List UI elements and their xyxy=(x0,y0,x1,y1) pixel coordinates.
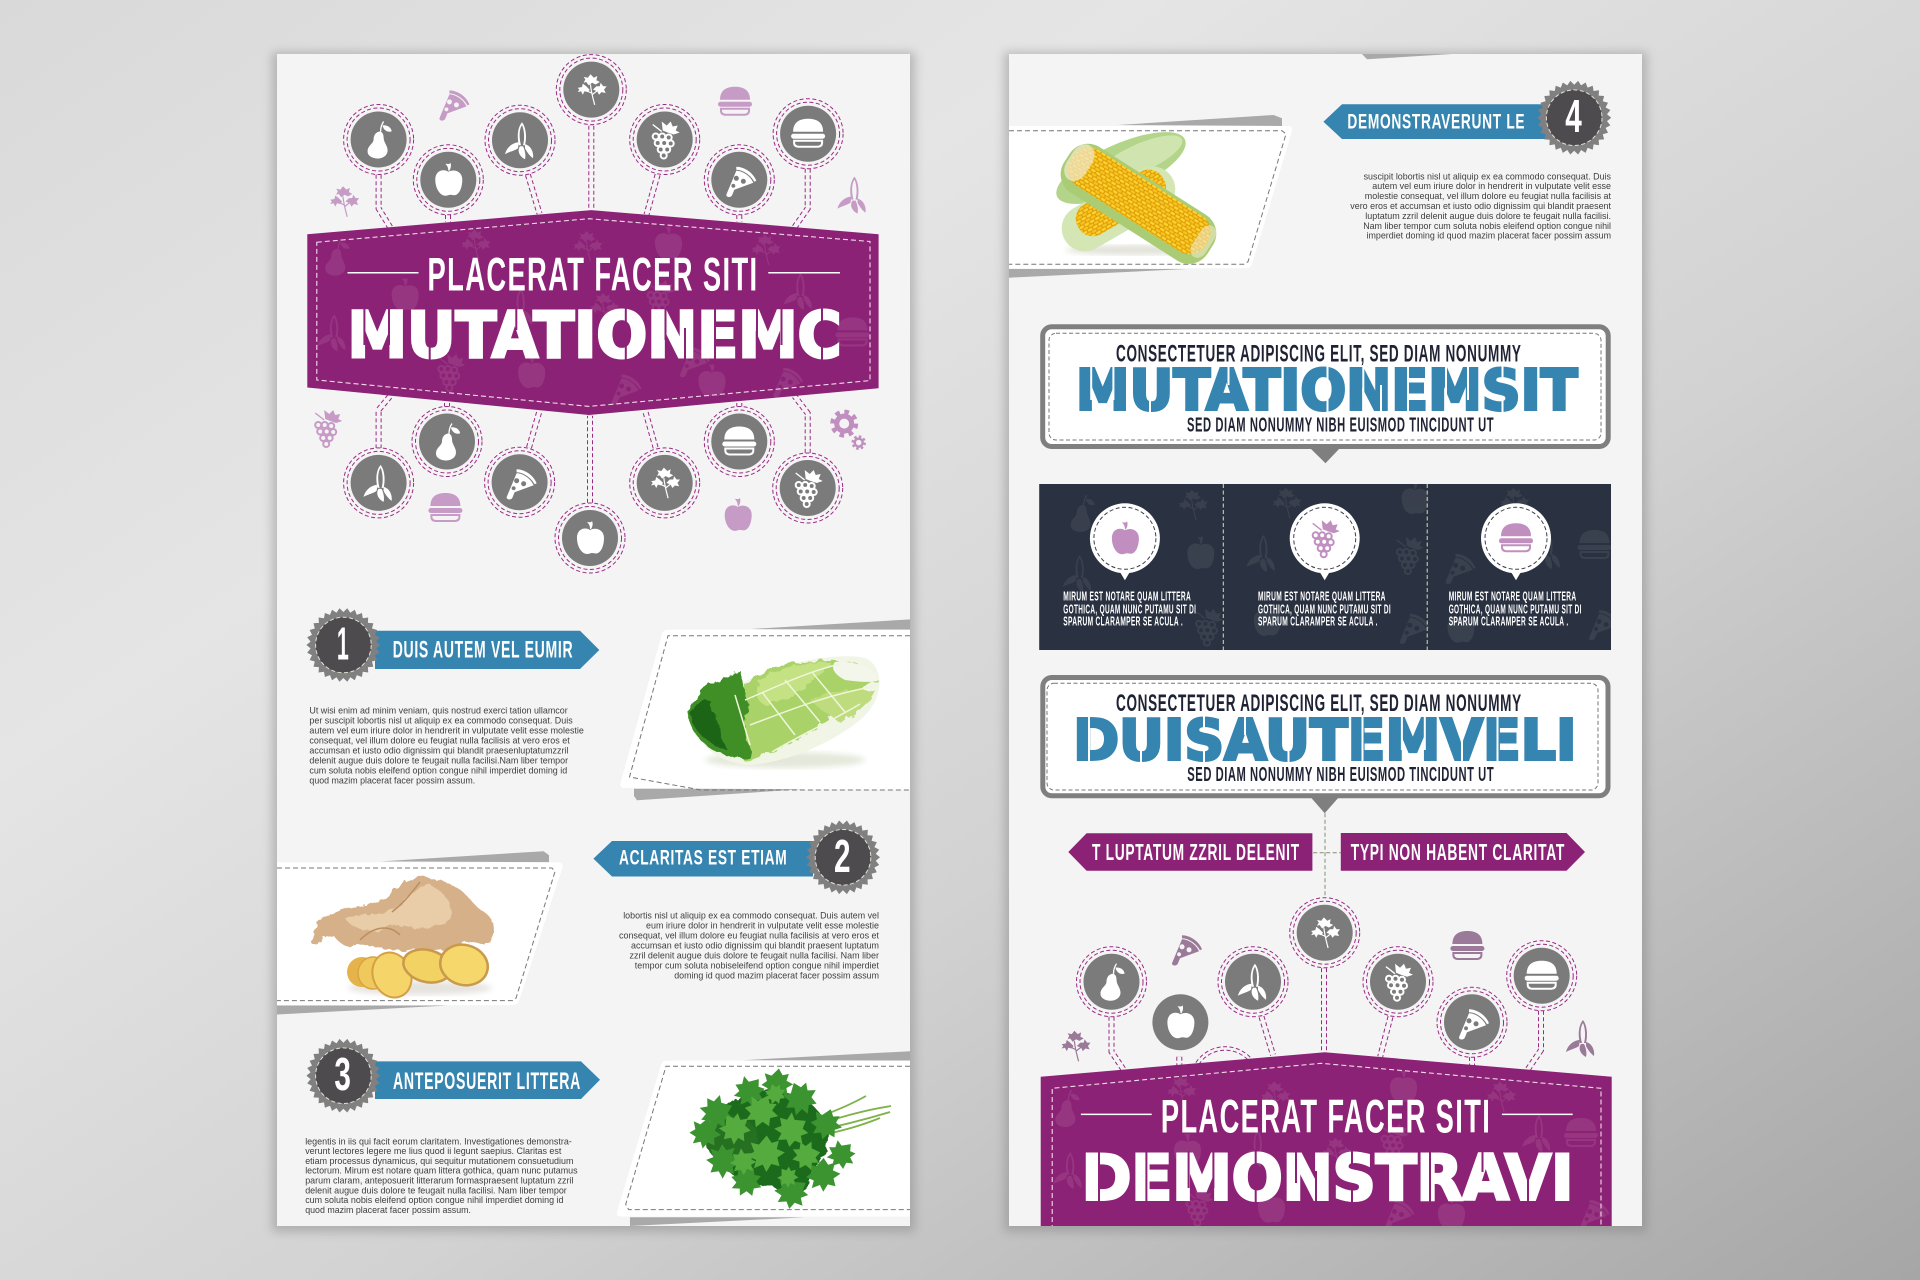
section 2 body text: lobortis nisl ut aliquip ex ea commodo consequat. Duis autem vel xyxy=(623,911,879,921)
section 1 body text: consequat, vel illum dolore eu feugiat nulla facilisis at vero eros et xyxy=(309,736,570,746)
section 3 ribbon: ANTEPOSUERIT LITTERA xyxy=(393,1068,581,1095)
section 2 ribbon xyxy=(593,820,880,894)
section 3 ribbon xyxy=(306,1039,600,1112)
photo card: corn xyxy=(1009,115,1292,278)
icon: gears xyxy=(833,412,865,449)
section 4 body text: luptatum zzril delenit augue duis dolore te feugait nulla facilisi. xyxy=(1365,211,1611,221)
section 3 body text: etiam processus dynamicus, qui sequitur mutationem consuetudium xyxy=(305,1156,574,1166)
stencil cuts: duis autem veli xyxy=(1089,713,1498,763)
section 1 body text: Ut wisi enim ad minim veniam, quis nostrud exerci tation ullamcor xyxy=(309,706,568,716)
icon: apple xyxy=(1152,994,1208,1050)
icon: banana xyxy=(1218,947,1288,1017)
icon: grapes lower xyxy=(773,453,843,523)
ribbon: t luptatum xyxy=(1068,833,1312,871)
heading: demonstravi: DEMONSTRAVI xyxy=(1082,1141,1573,1214)
section 3 body text: cum soluta nobis eleifend option congue nihil imperdiet doming id xyxy=(305,1195,564,1205)
badge 2: 2 xyxy=(834,830,852,882)
section 4 ribbon xyxy=(1323,81,1611,154)
feature 1 xyxy=(1063,503,1196,629)
badge 3: 3 xyxy=(334,1048,352,1100)
section 2 body text: accumsan et iusto odio dignissim qui blandit praesent luptatum xyxy=(631,941,879,951)
ribbon: t luptatum: T LUPTATUM ZZRIL DELENIT xyxy=(1092,839,1300,865)
partial inner ring behind banner xyxy=(1194,1050,1257,1113)
small muted food icons xyxy=(1062,931,1594,1061)
heading: placerat facer siti: PLACERAT FACER SITI xyxy=(428,248,758,301)
section 3 body text: quod mazim placerat facer possim assum. xyxy=(305,1205,471,1215)
icon: banana xyxy=(485,105,555,175)
badge 4: 4 xyxy=(1565,90,1583,142)
photo card: parsley xyxy=(617,1051,910,1226)
callout box: duis autem veli xyxy=(1043,678,1608,813)
icon: pear lower xyxy=(412,406,482,476)
section 2 body text: tempor cum soluta nobiseleifend option congue nihil imperdiet xyxy=(635,961,879,971)
stencil cuts: mutationem sit xyxy=(1091,363,1502,413)
illustration: corn xyxy=(1047,118,1225,272)
heading: mutationemc: MUTATIONEMC xyxy=(348,298,842,372)
section 2 body text: doming id quod mazim placerat facer possim assum xyxy=(674,971,879,981)
section 4 ribbon: DEMONSTRAVERUNT LE xyxy=(1347,110,1525,133)
section 3 body text: legentis in iis qui facit eorum claritatem. Investigationes demonstra- xyxy=(305,1136,572,1146)
badge 4 xyxy=(1537,81,1611,154)
heading: placerat facer siti: PLACERAT FACER SITI xyxy=(1161,1091,1491,1144)
icon: burger xyxy=(1507,941,1577,1011)
icon: pear xyxy=(344,104,414,174)
connectors: hero icons to banner xyxy=(379,126,808,503)
section 1 body text: cum soluta nobis eleifend option congue nihil imperdiet doming id xyxy=(309,766,567,776)
section 3 body text: verunt lectores legere me lius quod ii legunt saepius. Claritas est xyxy=(305,1146,562,1156)
feature 2: SPARUM CLARAMPER SE ACULA . xyxy=(1258,615,1378,629)
callout box: mutationem sit xyxy=(1043,327,1608,463)
icon: apple lower xyxy=(555,503,625,573)
connector: callout to ribbons xyxy=(1313,813,1341,897)
section 1 body text: accumsan et iusto odio dignissim qui blandit praesenluptatumzzril xyxy=(309,746,568,756)
dark panel: three features xyxy=(1039,481,1619,650)
feature 2: GOTHICA, QUAM NUNC PUTAMU SIT DI xyxy=(1258,602,1391,616)
heading rule left xyxy=(1081,1114,1152,1115)
section 3 body text xyxy=(305,1136,578,1215)
section 2 body text xyxy=(619,911,879,981)
section 2 ribbon: ACLARITAS EST ETIAM xyxy=(619,846,787,869)
callout box: mutationem sit: CONSECTETUER ADIPISCING ELIT, SED DIAM NONUMMY xyxy=(1116,341,1522,368)
feature 3: GOTHICA, QUAM NUNC PUTAMU SIT DI xyxy=(1449,602,1582,616)
section 1 body text xyxy=(309,706,584,786)
partial ring behind banner xyxy=(1190,1047,1260,1117)
section 2 body text: zzril delenit augue duis dolore te feugait nulla facilisi. Nam liber xyxy=(630,951,879,961)
connectors: lower icons to banner xyxy=(1112,968,1541,1070)
section 2 body text: consequat, vel illum dolore eu feugiat nulla facilisis at vero eros et xyxy=(619,931,879,941)
section 1 ribbon: DUIS AUTEM VEL EUMIR xyxy=(393,636,573,663)
icon: pizza lower xyxy=(485,447,555,517)
feature 1: MIRUM EST NOTARE QUAM LITTERA xyxy=(1063,590,1191,604)
icon: banana lower xyxy=(344,448,414,518)
top grey tab xyxy=(1362,54,1452,59)
panel: left poster xyxy=(272,52,915,1232)
photo card: cabbage xyxy=(620,619,910,800)
badge 3 xyxy=(306,1039,380,1112)
badge 1 xyxy=(306,608,380,682)
section 4 body text: vero eros et accumsan et iusto odio dignissim qui blandit praesent xyxy=(1350,201,1611,211)
feature 3 xyxy=(1449,503,1582,629)
heading rule left xyxy=(348,272,418,274)
section 4 body text: Nam liber tempor cum soluta nobis eleifend option congue nihil xyxy=(1363,221,1611,231)
heading rule right xyxy=(768,272,840,274)
feature 2: MIRUM EST NOTARE QUAM LITTERA xyxy=(1258,590,1386,604)
icon: parsley xyxy=(556,55,626,125)
icon: grapes xyxy=(630,104,700,174)
panel: right poster xyxy=(1004,52,1647,1232)
callout box: mutationem sit: MUTATIONEMSIT xyxy=(1076,358,1578,423)
section 1 body text: per suscipit lobortis nisl ut aliquip ex ea commodo consequat. Duis xyxy=(309,716,573,726)
title banner xyxy=(307,210,879,415)
section 1 body text: autem vel eum iriure dolor in hendrerit in vulputate velit esse molestie xyxy=(309,726,584,736)
section 1 body text: delenit augue duis dolore te feugait nulla facilisi.Nam liber tempor xyxy=(309,756,568,766)
callout box: mutationem sit: SED DIAM NONUMMY NIBH EUISMOD TINCIDUNT UT xyxy=(1187,415,1494,437)
icon: pizza xyxy=(1437,987,1507,1057)
illustration: cabbage xyxy=(687,656,879,768)
section 3 body text: lectorum. Mirum est notare quam littera gothica, quam nunc putamus xyxy=(305,1166,578,1176)
section 4 body text: autem vel eum iriure dolor in hendrerit in vulputate velit esse xyxy=(1372,181,1611,191)
icon: parsley xyxy=(1290,898,1360,968)
section 4 body text: suscipit lobortis nisl ut aliquip ex ea commodo consequat. Duis xyxy=(1364,171,1611,181)
section 4 body text: imperdiet doming id quod mazim placerat facer possim assum xyxy=(1366,231,1611,241)
ribbon: typi non habent: TYPI NON HABENT CLARITAT xyxy=(1351,839,1565,865)
icon: pear xyxy=(1076,947,1146,1017)
feature 3: SPARUM CLARAMPER SE ACULA . xyxy=(1449,615,1568,629)
section 2 body text: eum iriure dolor in hendrerit in vulputate velit esse molestie xyxy=(646,921,879,931)
section 3 body text: parum claram, anteposuerit litterarum formaspraesent luptatum zzril xyxy=(305,1176,573,1186)
stencil cuts: demonstravi xyxy=(1099,1149,1528,1203)
icon: burger xyxy=(773,99,843,169)
section 1 body text: quod mazim placerat facer possim assum. xyxy=(309,776,475,786)
badge 2 xyxy=(806,820,880,894)
icon: parsley lower xyxy=(630,448,700,518)
icon: grapes xyxy=(1363,947,1433,1017)
small light food icons xyxy=(315,87,866,531)
callout box: duis autem veli: SED DIAM NONUMMY NIBH EUISMOD TINCIDUNT UT xyxy=(1187,764,1494,786)
stencil cuts: mutationemc xyxy=(364,306,822,360)
section 4 body text xyxy=(1350,171,1611,241)
callout box: duis autem veli: CONSECTETUER ADIPISCING ELIT, SED DIAM NONUMMY xyxy=(1116,690,1522,717)
feature 1: GOTHICA, QUAM NUNC PUTAMU SIT DI xyxy=(1063,602,1196,616)
badge 1: 1 xyxy=(337,618,350,670)
callout box: duis autem veli: DUISAUTEMVELI xyxy=(1073,708,1576,773)
feature 2 xyxy=(1258,503,1391,629)
section 1 ribbon xyxy=(306,608,599,682)
closing banner xyxy=(1041,1052,1612,1230)
photo card: ginger xyxy=(277,851,563,1014)
icon: burger lower xyxy=(704,406,774,476)
feature 1: SPARUM CLARAMPER SE ACULA . xyxy=(1063,615,1183,629)
icon: pizza xyxy=(704,145,774,215)
heading rule right xyxy=(1502,1114,1573,1115)
section 3 body text: delenit augue duis dolore te feugait nulla facilisi. Nam liber tempor xyxy=(305,1185,567,1195)
feature 3: MIRUM EST NOTARE QUAM LITTERA xyxy=(1449,590,1576,604)
section 4 body text: molestie consequat, vel illum dolore eu feugiat nulla facilisis at xyxy=(1365,191,1611,201)
ribbon: typi non habent xyxy=(1341,833,1585,871)
illustration: parsley xyxy=(686,1066,891,1216)
illustration: ginger xyxy=(311,877,494,1003)
icon: apple xyxy=(413,145,483,215)
